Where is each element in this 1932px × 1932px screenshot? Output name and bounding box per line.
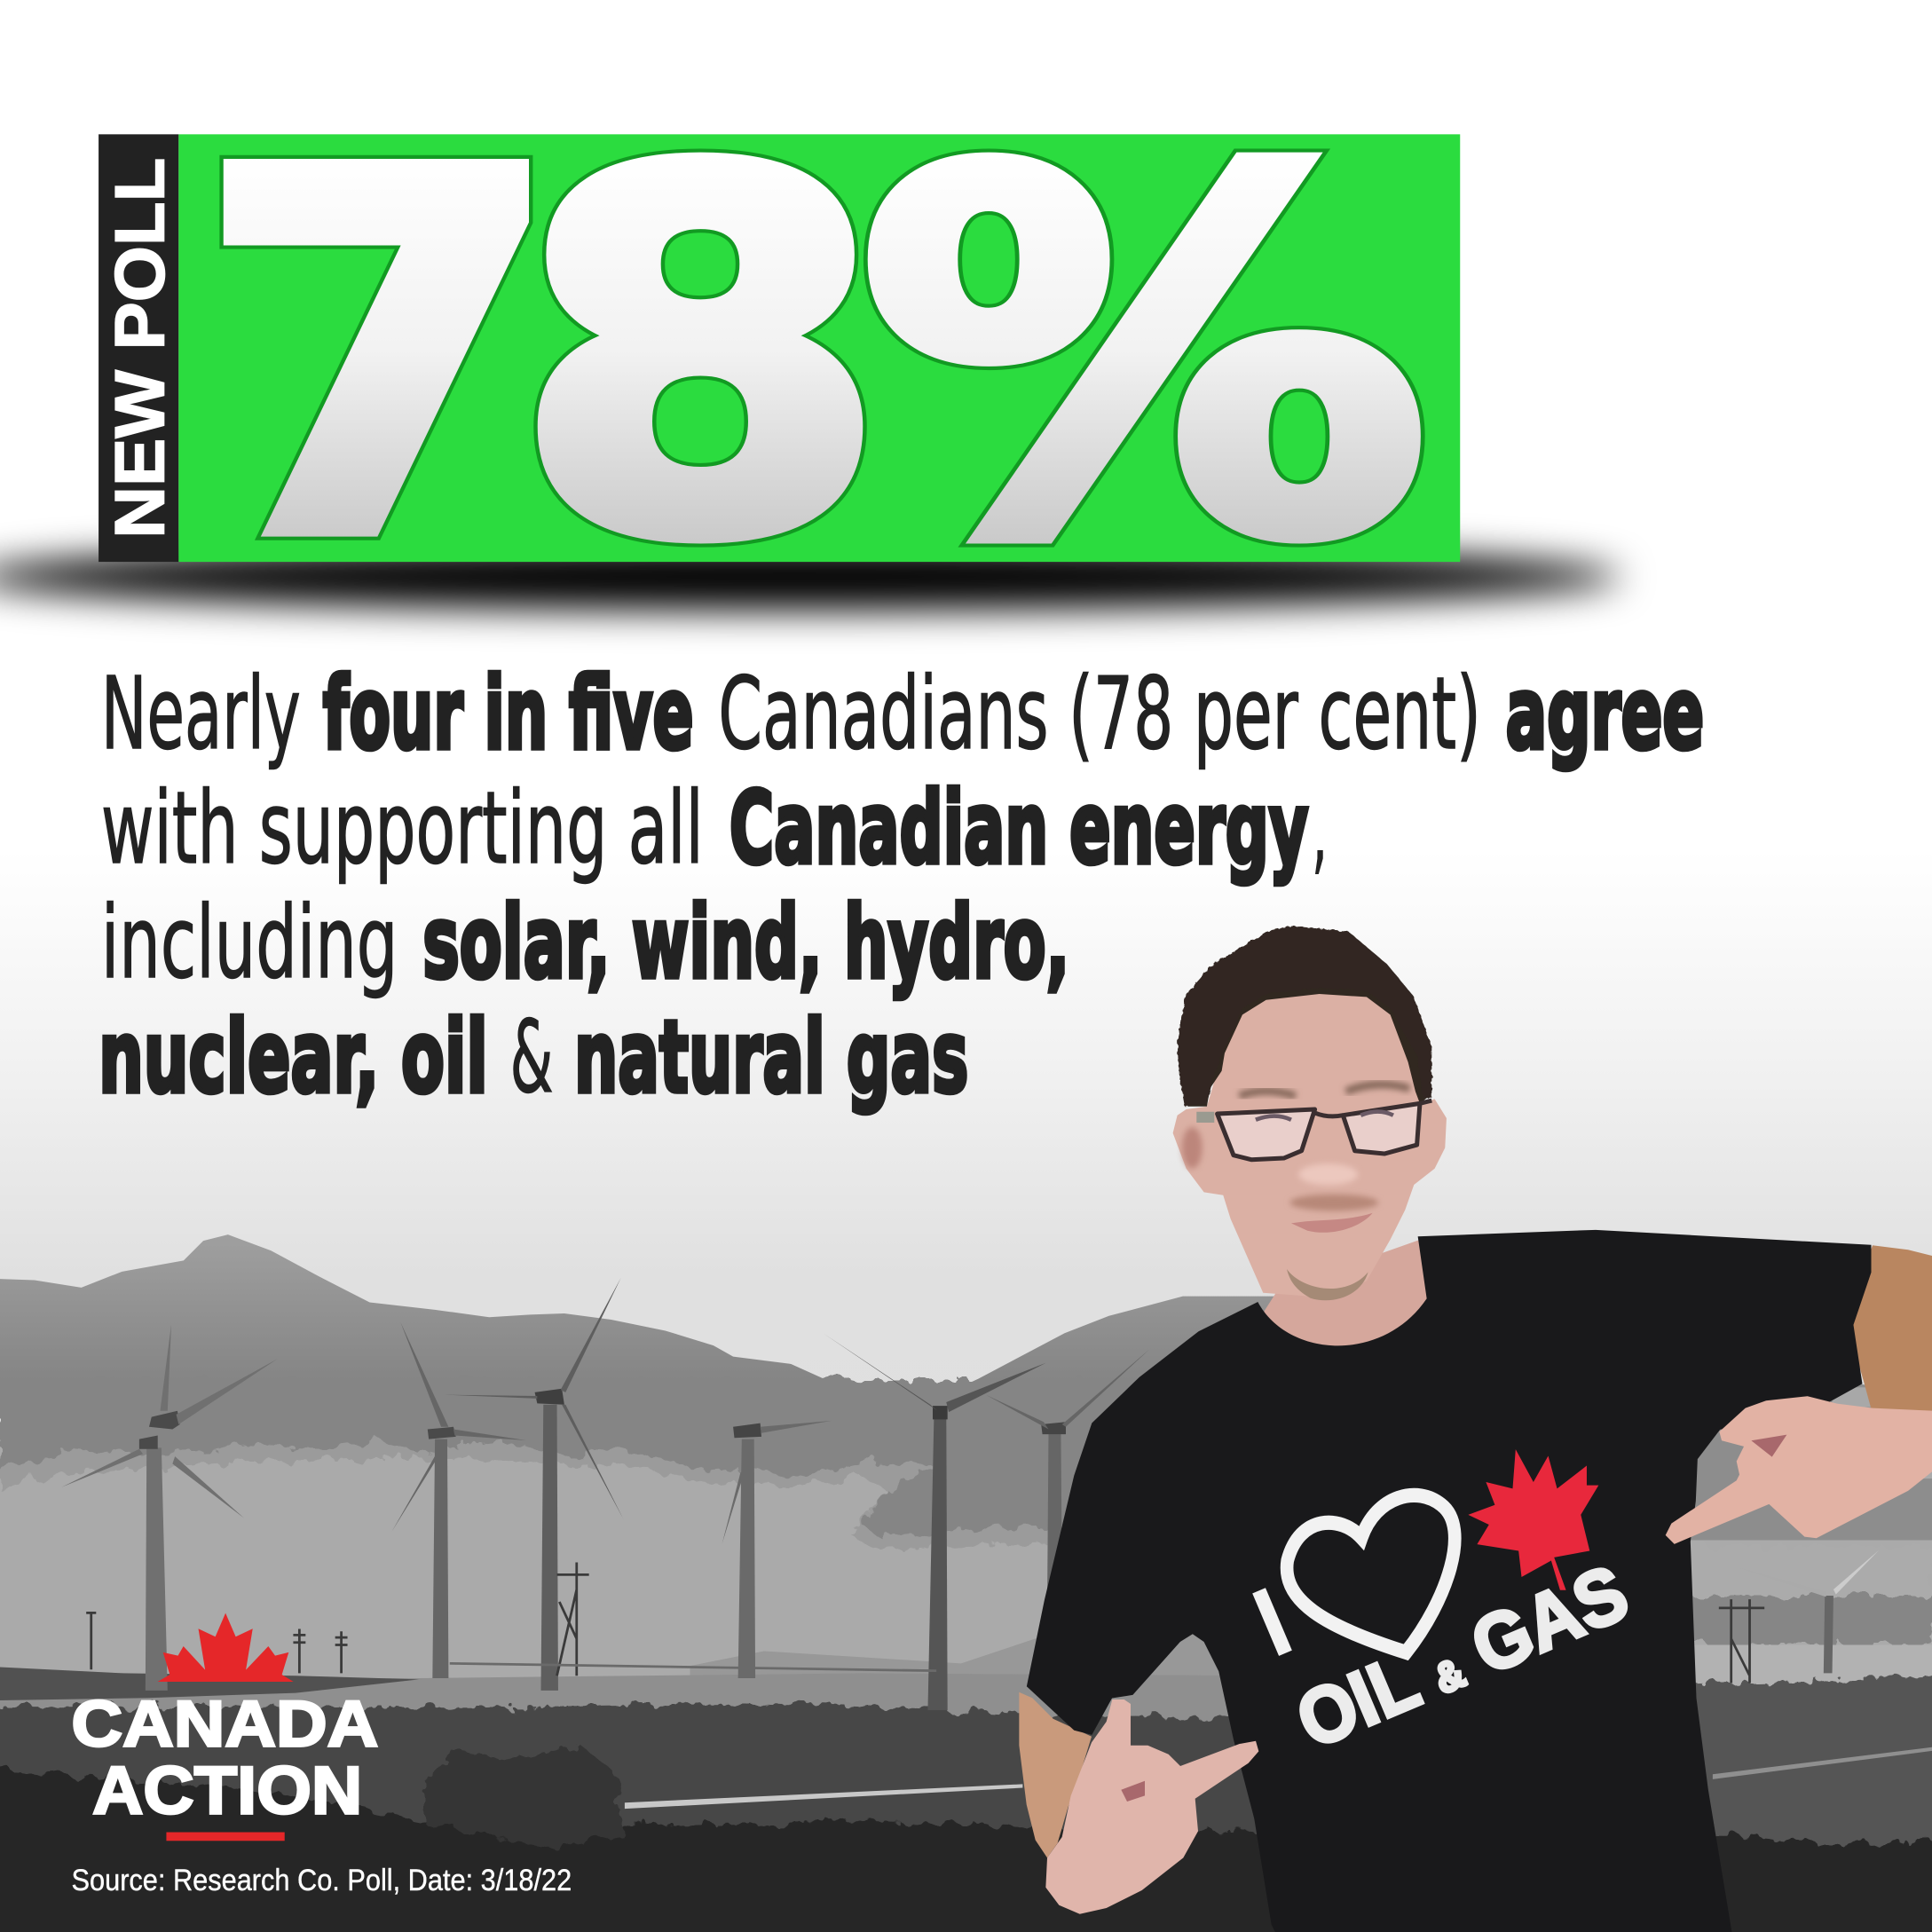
goatee	[1287, 1269, 1368, 1300]
green panel	[178, 134, 1460, 562]
mid ground	[0, 1703, 1725, 1932]
hair rough edge	[1178, 926, 1431, 1107]
big number 78 percent outline	[199, 70, 1428, 643]
new poll label: NEW POLL	[100, 158, 179, 539]
big number 78 percent fill: 8	[515, 70, 886, 643]
foreground dark	[0, 1764, 1932, 1932]
big number 78 percent fill: 7	[199, 70, 561, 643]
head and neck	[1173, 926, 1447, 1376]
distant hills	[690, 1628, 1244, 1682]
logo word action: ACTION	[92, 1754, 362, 1829]
upper lip shadow	[1289, 1195, 1378, 1210]
headline text block	[99, 656, 1704, 1116]
big number 78 percent outline: %	[860, 70, 1428, 643]
right band light	[1651, 1645, 1932, 1687]
left hand	[1045, 1699, 1258, 1914]
hair base	[1183, 932, 1427, 1107]
turbine 1	[61, 1325, 277, 1691]
bushes	[425, 1744, 622, 1849]
right hand	[1666, 1396, 1932, 1544]
big number 78 percent outline: 8	[515, 70, 886, 643]
right haze band	[1651, 1546, 1932, 1602]
shirt text oil and gas: OIL & GAS	[1284, 1548, 1640, 1765]
mouth	[1291, 1213, 1373, 1233]
small right turbine	[1738, 1550, 1879, 1673]
landscape	[0, 1234, 1932, 1932]
line 3: solar, wind, hydro,	[422, 885, 1069, 1001]
left hand gap	[1121, 1781, 1145, 1802]
turbine 5	[823, 1333, 1046, 1710]
t-shirt	[1027, 1230, 1872, 1932]
logo maple leaf	[158, 1613, 294, 1682]
banner drop shadow	[0, 543, 1621, 610]
big number 78 percent fill: %	[860, 70, 1428, 643]
logo red bar	[166, 1833, 285, 1841]
right hand gap	[1751, 1435, 1786, 1457]
turbine 2	[392, 1322, 526, 1678]
line 1	[101, 656, 1704, 772]
maple leaf on shirt	[1468, 1449, 1598, 1590]
face	[1173, 974, 1447, 1298]
mountain lower fringe	[0, 1417, 1269, 1550]
eyes	[1256, 1112, 1393, 1120]
line 4: natural gas	[574, 999, 968, 1116]
line 1: four in five	[323, 656, 694, 772]
line 1: Canadians (78 per cent)	[718, 656, 1481, 772]
nose highlight	[1298, 1163, 1358, 1185]
line 2: Canadian energy	[729, 770, 1308, 887]
road highlight	[625, 1784, 1022, 1809]
haze band	[0, 1435, 1932, 1694]
utility poles	[86, 1562, 1764, 1684]
line 2: ,	[1311, 770, 1329, 887]
line 4: &	[510, 999, 553, 1116]
line 1: agree	[1506, 656, 1704, 772]
pale field	[0, 1673, 1663, 1731]
new poll side tab	[99, 134, 178, 562]
right upper arm	[1852, 1245, 1932, 1420]
right road highlight	[1713, 1747, 1932, 1779]
source line: Source: Research Co. Poll, Date: 3/18/22	[72, 1864, 572, 1897]
shirt letter I: I	[1238, 1565, 1306, 1678]
right mid ground	[1651, 1676, 1932, 1932]
line 2: with supporting all	[101, 770, 704, 887]
logo word canada: CANADA	[72, 1686, 378, 1760]
right band dark	[1651, 1596, 1932, 1645]
big number 78 percent outline: 7	[199, 70, 561, 643]
turbine 6	[986, 1349, 1149, 1589]
mountain jagged base	[0, 1380, 1269, 1538]
big number 78 percent fill	[199, 70, 1428, 643]
person pointing at shirt	[1019, 926, 1932, 1932]
eyebrow right	[1346, 1084, 1409, 1092]
banner: 78 percent	[99, 70, 1460, 643]
mountains	[0, 1234, 1306, 1417]
neck	[1242, 1236, 1438, 1376]
line 3: including	[101, 885, 398, 1001]
heart on shirt	[1287, 1495, 1455, 1652]
line 4: nuclear, oil	[99, 999, 488, 1116]
glasses	[1196, 1100, 1431, 1160]
dark left field wedge	[0, 1667, 419, 1700]
elbow gap tone	[1833, 1387, 1872, 1408]
line 1: Nearly	[101, 656, 301, 772]
line 3	[101, 885, 1069, 1001]
canada action logo	[72, 1613, 378, 1841]
turbine 4	[722, 1421, 832, 1678]
eyebrow left	[1240, 1091, 1296, 1096]
turbine 3	[445, 1278, 624, 1691]
left upper arm	[1019, 1692, 1092, 1857]
right hand mountain	[1651, 1355, 1932, 1540]
ear shading	[1182, 1127, 1203, 1169]
t-shirt and chest graphics	[1027, 1230, 1872, 1932]
